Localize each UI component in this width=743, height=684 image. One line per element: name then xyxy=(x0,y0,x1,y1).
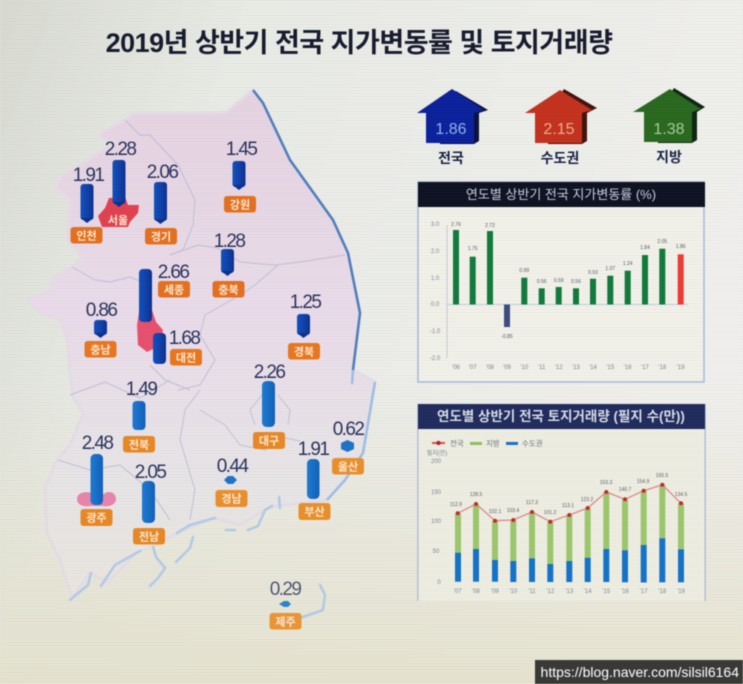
summary house: nationwide: 전국 xyxy=(438,150,464,166)
region: Chungbuk xyxy=(212,231,245,298)
y axis labels: -1.0 xyxy=(430,329,441,335)
region: Gangwon xyxy=(224,139,257,212)
region: Gyeonggi: 2.06 xyxy=(147,162,178,183)
legend: 수도권 xyxy=(522,439,543,448)
summary house: provinces xyxy=(633,88,705,165)
x axis labels: '16 xyxy=(624,365,632,371)
region: Ulsan: 0.62 xyxy=(333,419,364,440)
axis lines xyxy=(447,225,688,358)
chart heading: 연도별 상반기 전국 지가변동률 (%) xyxy=(466,187,656,202)
region: Incheon xyxy=(70,165,104,244)
bar values: 1.07 xyxy=(605,266,615,272)
region: Jeonnam xyxy=(133,462,166,544)
x axis labels: '10 xyxy=(509,589,518,595)
region: Gyeongnam: 0.44 xyxy=(217,456,249,477)
region: Jeju xyxy=(270,579,302,630)
x axis labels: '16 xyxy=(621,589,630,595)
summary house: nationwide xyxy=(417,89,488,166)
total values: 128.5 xyxy=(470,492,482,498)
y axis labels: 0.0 xyxy=(431,302,440,308)
chart heading xyxy=(418,404,705,429)
x axis labels: '19 xyxy=(677,365,685,371)
total values xyxy=(450,473,687,516)
stacked bars: provinces xyxy=(455,485,684,564)
map landmass xyxy=(27,90,375,598)
total values: 112.9 xyxy=(450,502,462,508)
y axis labels: 필지(만) xyxy=(427,449,447,457)
chart heading xyxy=(418,182,705,207)
panel: yearly land transactions chart xyxy=(418,404,705,601)
region: Daejeon xyxy=(153,328,202,366)
region: Gyeongnam xyxy=(216,456,249,507)
x axis labels: '11 xyxy=(528,589,536,595)
x axis labels: '12 xyxy=(555,365,563,371)
bar values: 0.99 xyxy=(519,268,529,274)
region: Gangwon: 강원 xyxy=(230,198,250,212)
total values: 140.7 xyxy=(619,487,631,493)
x axis labels: '06 xyxy=(452,365,461,371)
total values: 117.3 xyxy=(526,500,538,506)
summary house: capital area xyxy=(525,89,597,166)
highlight: Gwangju area xyxy=(77,492,116,506)
y axis labels: 1.0 xyxy=(431,276,440,282)
bar values: -0.85 xyxy=(501,334,513,340)
region: Busan: 부산 xyxy=(304,504,325,518)
x axis labels: '14 xyxy=(589,365,598,371)
x axis labels: '17 xyxy=(641,365,650,371)
province boundaries xyxy=(58,120,345,520)
region: Gyeongnam: 경남 xyxy=(221,492,242,506)
bar values: 2.05 xyxy=(657,239,667,245)
region: Chungbuk: 1.28 xyxy=(214,231,245,252)
region: Gyeongbuk: 경북 xyxy=(294,346,314,358)
region: Busan: 1.91 xyxy=(298,439,329,460)
x axis labels: '19 xyxy=(677,589,686,595)
x axis labels: '08 xyxy=(472,589,481,595)
region: Daejeon: 대전 xyxy=(176,350,196,364)
x axis labels: '07 xyxy=(454,589,462,595)
legend: 지방 xyxy=(486,438,500,448)
region: Sejong: 2.66 xyxy=(158,262,189,283)
total values: 102.1 xyxy=(489,509,501,515)
summary house: capital area: 수도권 xyxy=(541,150,579,166)
region: Seoul: 서울 xyxy=(108,214,128,227)
x axis labels: '17 xyxy=(640,589,648,595)
bar values: 0.56 xyxy=(571,279,581,285)
bar values: 1.75 xyxy=(468,246,478,252)
total values: 123.2 xyxy=(581,497,593,503)
bar values: 0.56 xyxy=(537,279,547,285)
legend: 전국 xyxy=(450,438,464,448)
bar values: 1.24 xyxy=(623,261,633,267)
total values: 103.4 xyxy=(507,508,519,514)
bar values: 0.93 xyxy=(588,270,598,276)
region: Incheon: 1.91 xyxy=(73,165,104,186)
region: Gwangju: 광주 xyxy=(86,512,107,524)
region: Gyeonggi: 경기 xyxy=(151,230,171,244)
watermark: https://blog.naver.com/silsil6164 xyxy=(541,664,739,680)
y axis labels: 150 xyxy=(431,490,442,496)
region: Jeonbuk: 1.49 xyxy=(126,379,157,400)
x axis labels: '18 xyxy=(658,589,667,595)
y axis labels: 2.0 xyxy=(431,249,440,255)
region: Gangwon: 1.45 xyxy=(226,139,257,160)
region: Jeju: 제주 xyxy=(275,614,296,628)
region: Chungnam xyxy=(84,300,117,358)
region: Daejeon: 1.68 xyxy=(169,328,200,349)
region: Jeonbuk: 전북 xyxy=(129,438,149,452)
region: Busan xyxy=(298,439,330,520)
east coast line xyxy=(253,90,360,370)
x axis labels: '15 xyxy=(606,365,615,371)
region: Daegu xyxy=(253,362,285,449)
region: Ulsan xyxy=(332,419,364,474)
panel: yearly land price change chart xyxy=(418,182,705,382)
map of South Korea xyxy=(27,90,375,630)
region: Ulsan: 울산 xyxy=(338,460,358,474)
bar values: 1.84 xyxy=(640,245,650,251)
total values: 134.5 xyxy=(675,492,687,498)
summary house: provinces: 지방 xyxy=(656,149,682,165)
region: Sejong: 세종 xyxy=(164,284,184,296)
bar values xyxy=(451,222,686,340)
region: Chungnam: 0.86 xyxy=(86,300,117,321)
region: Jeju: 0.29 xyxy=(270,579,301,600)
region: Incheon: 인천 xyxy=(76,228,97,242)
total values: 113.1 xyxy=(562,503,574,509)
total values: 165.5 xyxy=(656,473,668,479)
y axis labels: 3.0 xyxy=(431,222,440,228)
x axis labels: '13 xyxy=(565,589,574,595)
region: Jeonnam: 2.05 xyxy=(135,462,166,483)
summary house: nationwide: 1.86 xyxy=(435,121,467,138)
y axis labels xyxy=(427,449,447,586)
chart heading: 연도별 상반기 전국 토지거래량 (필지 수(만)) xyxy=(437,409,685,424)
region: Gyeongbuk: 1.25 xyxy=(290,292,321,313)
region: Gyeonggi xyxy=(145,162,178,244)
x axis labels: '18 xyxy=(658,365,667,371)
total values: 101.2 xyxy=(544,510,556,516)
region: Chungbuk: 충북 xyxy=(218,284,239,296)
x axis labels: '08 xyxy=(486,365,495,371)
bar values: 0.59 xyxy=(554,278,564,284)
total values: 154.9 xyxy=(637,479,649,485)
region: Seoul: 2.28 xyxy=(105,139,136,160)
bar values: 1.86 xyxy=(676,244,686,250)
summary house: capital area: 2.15 xyxy=(543,121,575,138)
legend xyxy=(432,438,543,448)
region: Seoul xyxy=(105,139,136,227)
stacked bars: capital area xyxy=(455,538,684,582)
x axis labels: '12 xyxy=(546,589,555,595)
region: Chungnam: 충남 xyxy=(90,344,111,356)
x axis labels: '15 xyxy=(602,589,611,595)
x axis labels: '13 xyxy=(572,365,581,371)
title: 2019년 상반기 전국 지가변동률 및 토지거래량 xyxy=(106,28,613,58)
x axis labels: '09 xyxy=(491,589,500,595)
region: Sejong xyxy=(139,262,190,322)
x axis labels: '09 xyxy=(503,365,512,371)
x axis labels: '10 xyxy=(520,365,529,371)
region: Jeonnam: 전남 xyxy=(139,530,159,544)
y axis labels: 50 xyxy=(433,549,440,555)
y axis labels: 100 xyxy=(431,519,442,525)
y axis labels xyxy=(430,222,441,362)
highlight: Sejong area xyxy=(137,310,163,352)
region: Gyeongbuk xyxy=(288,292,321,360)
bar values: 2.72 xyxy=(485,223,495,229)
total values: 153.3 xyxy=(600,480,612,486)
watermark xyxy=(535,660,743,684)
x axis labels: '11 xyxy=(538,365,546,371)
y axis labels: -2.0 xyxy=(430,356,441,362)
region: Gwangju xyxy=(80,433,113,526)
region: Daegu: 2.26 xyxy=(254,362,285,383)
y axis labels: 200 xyxy=(431,459,442,465)
total line xyxy=(456,483,683,524)
bar values: 2.76 xyxy=(451,222,461,228)
region: Gwangju: 2.48 xyxy=(82,433,113,454)
y axis labels: 0 xyxy=(437,580,441,586)
x axis labels: '14 xyxy=(584,589,592,595)
summary house: provinces: 1.38 xyxy=(653,121,685,138)
highlight: Seoul area xyxy=(98,197,139,227)
x axis labels: '07 xyxy=(469,365,477,371)
south coast lines xyxy=(70,497,325,620)
x axis labels xyxy=(452,365,685,371)
x axis labels xyxy=(454,589,686,595)
region: Daegu: 대구 xyxy=(259,434,279,448)
region: Jeonbuk xyxy=(123,379,157,452)
bars xyxy=(453,230,684,327)
